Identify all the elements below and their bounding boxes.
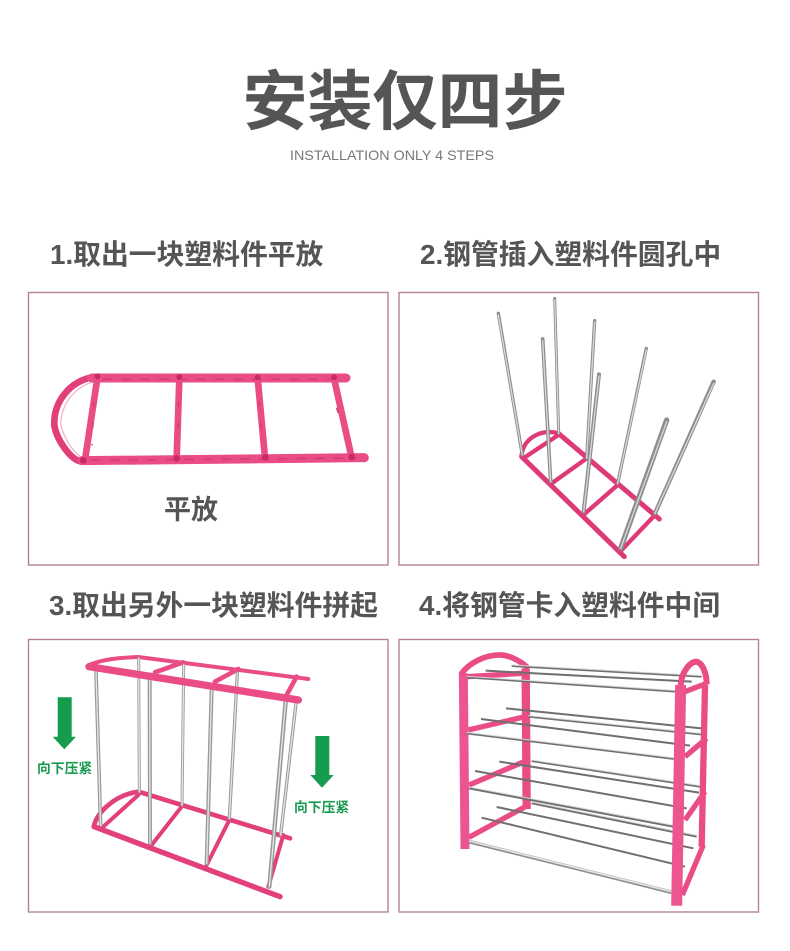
- illustration: pipes in pink frame: [498, 298, 714, 557]
- heading: step 3: 3.取出另外一块塑料件拼起: [49, 590, 378, 621]
- heading: step 1: 1.取出一块塑料件平放: [50, 239, 324, 270]
- arrow: press down right: [310, 736, 334, 788]
- panel: step 3 second part on top: [28, 640, 388, 912]
- panel: step 2 pipes inserted: [399, 292, 758, 565]
- label: press down left: 向下压紧: [37, 760, 92, 776]
- illustration: assembled shoe rack: [461, 655, 707, 906]
- heading: step 2: 2.钢管插入塑料件圆孔中: [420, 239, 721, 270]
- label: press down right: 向下压紧: [294, 799, 349, 815]
- illustration: assembled frame with pipes: [89, 657, 308, 897]
- arrow: press down left: [53, 697, 76, 749]
- title: 安装仅四步: [242, 65, 568, 138]
- panel: step 1 flat plastic part: [28, 292, 388, 565]
- illustration: flat pink frame: [54, 373, 364, 464]
- heading: step 4: 4.将钢管卡入塑料件中间: [419, 590, 720, 621]
- label: lay flat: 平放: [164, 495, 218, 525]
- subtitle: INSTALLATION ONLY 4 STEPS: [290, 147, 494, 163]
- panel: step 4 finished rack: [399, 640, 758, 912]
